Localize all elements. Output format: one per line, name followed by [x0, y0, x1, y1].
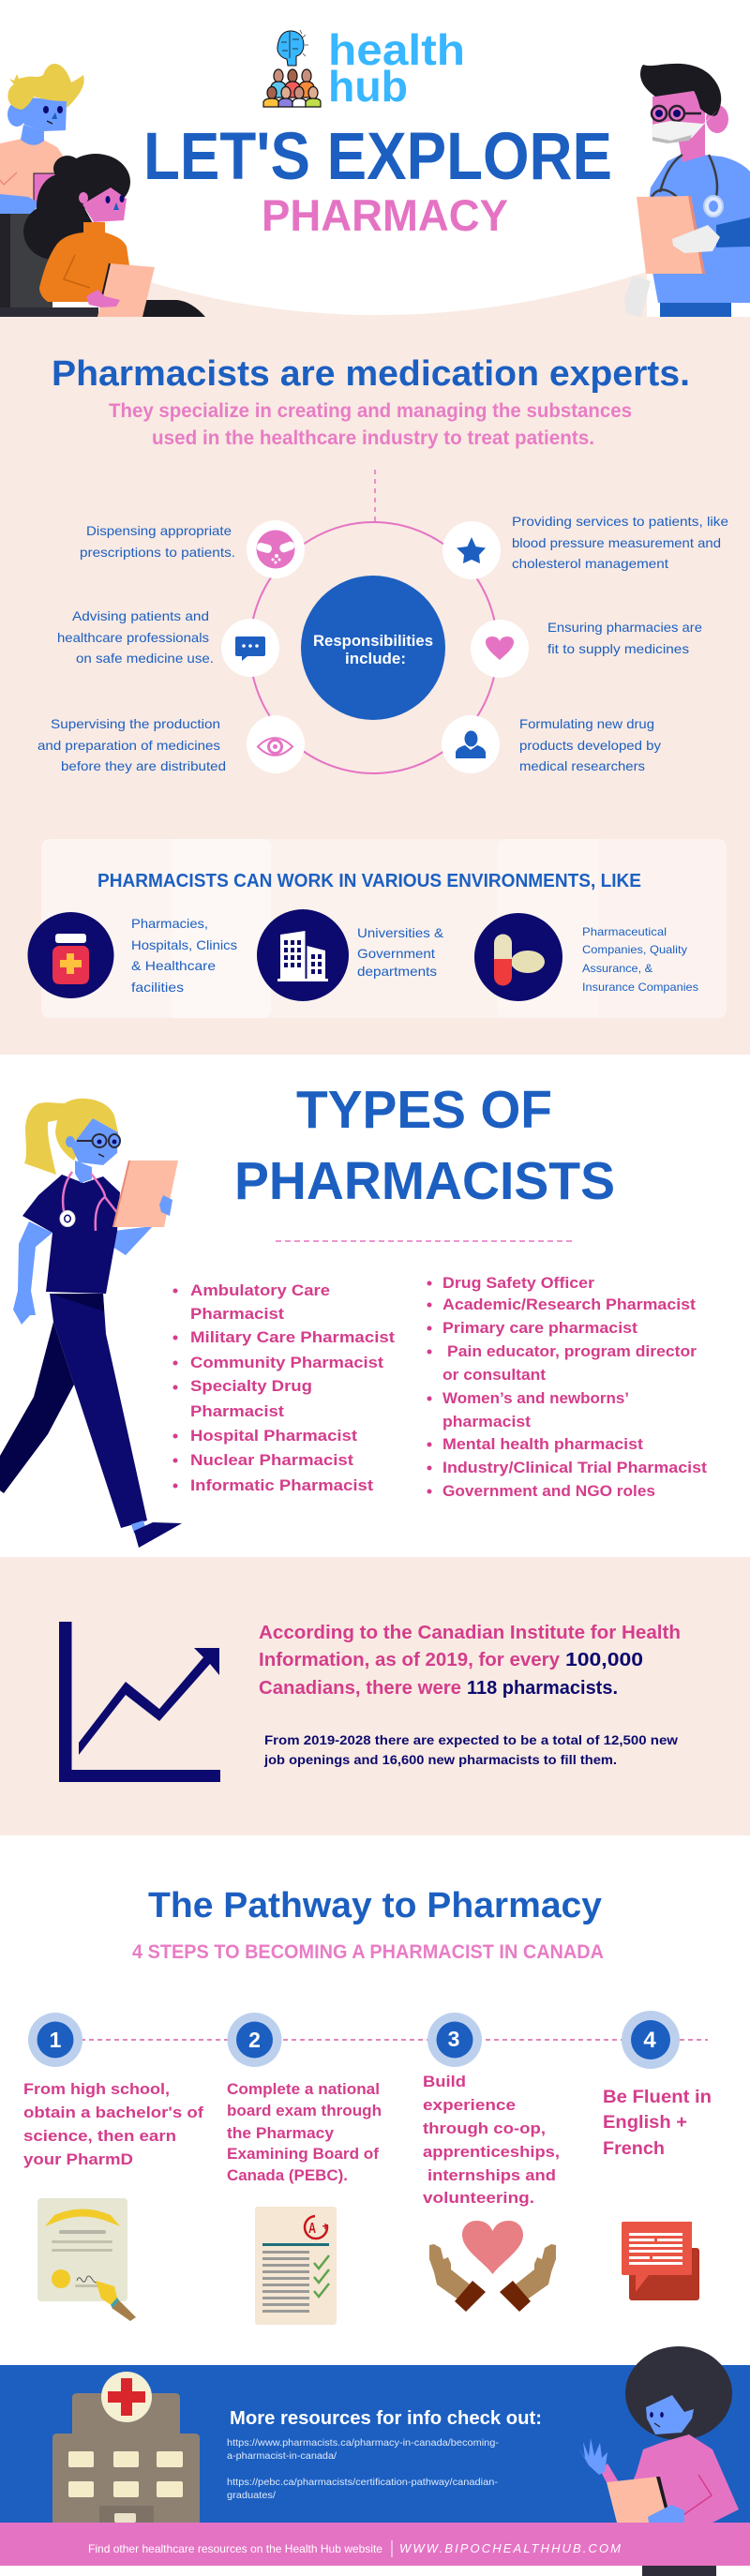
list: left column: Specialty Drug [190, 1377, 312, 1395]
text: more resources: https://pebc.ca/pharmacists/certification-pathway/canadian- [227, 2477, 499, 2488]
step 3 text: apprenticeships, [423, 2143, 560, 2161]
list: right column: Primary care pharmacist [442, 1319, 638, 1337]
icon: growth chart [59, 1622, 220, 1782]
step 2 text: Canada (PEBC). [227, 2166, 348, 2184]
step 4 text: Be Fluent in [603, 2087, 712, 2107]
icon: person [442, 715, 500, 773]
label: providing services: cholesterol management [512, 556, 668, 571]
illustration: seated woman with clipboard [0, 154, 205, 317]
logo: health hub [263, 25, 465, 111]
list: left column: Ambulatory Care [190, 1281, 330, 1299]
label: formulating: products developed by [519, 738, 661, 753]
label: dispensing [80, 523, 235, 560]
step 3 text: experience [423, 2096, 516, 2114]
icon: graded test: + [322, 2220, 329, 2233]
text: pharmaceutical: Insurance Companies [582, 981, 698, 994]
icon: graded test [255, 2207, 337, 2325]
logo wordmark: hub [328, 62, 408, 111]
header panel [0, 25, 750, 319]
text: job openings: From 2019-2028 there are expected to be a total of 12,500 new [264, 1732, 678, 1747]
text: canadian statistics [259, 1623, 681, 1699]
icon: hands and heart [429, 2221, 556, 2312]
heading: Pharmacists are medication experts. [52, 354, 690, 394]
timeline [28, 2011, 708, 2069]
step 1 text: your PharmD [23, 2150, 133, 2168]
icon: capsule and tablet [474, 913, 562, 1001]
step 2 text: the Pharmacy [227, 2124, 335, 2142]
text: more resources: More resources for info check out: [230, 2408, 542, 2429]
label: advising [57, 608, 214, 666]
step 3 text: Build [423, 2073, 466, 2090]
icon: group of people [263, 69, 321, 107]
list: left column: Pharmacist [190, 1402, 284, 1420]
list: left column: Military Care Pharmacist [190, 1328, 395, 1346]
text: job openings [263, 1732, 678, 1767]
text: more resources: graduates/ [227, 2490, 276, 2501]
subheading: steps: 4 STEPS TO BECOMING A PHARMACIST IN CANADA [132, 1941, 604, 1963]
panel: statistics [0, 1557, 750, 1835]
step 2 marker: 2 [248, 2028, 261, 2052]
label: ensuring [548, 620, 702, 656]
heading: types: TYPES OF [296, 1080, 552, 1140]
panel: work environments [28, 839, 727, 1018]
subheading: They specialize in creating and managing the substances [109, 400, 632, 422]
heading: types [234, 1080, 615, 1211]
subheading [109, 400, 632, 449]
subtitle: PHARMACY [262, 190, 508, 240]
title: LET'S EXPLORE [143, 120, 612, 194]
label: formulating [519, 716, 661, 773]
label: supervising [38, 716, 226, 773]
icon: medicine bottle [28, 912, 114, 998]
step 3 text: internships and [428, 2166, 556, 2184]
step 4 marker [622, 2011, 680, 2069]
list: left column: Pharmacist [190, 1305, 284, 1323]
list: left column: Hospital Pharmacist [190, 1427, 357, 1445]
step 3 text [423, 2073, 560, 2207]
list: right column: Drug Safety Officer [442, 1274, 594, 1292]
step 4 text: French [603, 2138, 665, 2159]
step 1 text: From high school, [23, 2080, 170, 2098]
panel: resources footer [0, 2346, 750, 2576]
icon: speech bubble [221, 619, 279, 677]
icon: graded test: A [308, 2221, 316, 2237]
text: more resources: a-pharmacist-in-canada/ [227, 2450, 337, 2462]
text: universities [357, 925, 444, 979]
step 3 marker [428, 2013, 482, 2067]
heading: environments: PHARMACISTS CAN WORK IN VARIOUS ENVIRONMENTS, LIKE [98, 871, 641, 891]
icon: eye [247, 715, 305, 773]
text: universities: Universities & [357, 925, 444, 940]
text: canadian statistics: 118 pharmacists. [467, 1678, 618, 1699]
panel: pathway [23, 1886, 712, 2325]
icon: pills [247, 520, 305, 578]
list: right column: Academic/Research Pharmacist [442, 1295, 696, 1313]
text: pharmacies: Pharmacies, [131, 916, 208, 931]
step 4 text: English + [603, 2112, 687, 2133]
list: right column: Women’s and newborns’ [442, 1389, 629, 1407]
illustration: man with tablet [0, 64, 84, 214]
label: formulating: medical researchers [519, 758, 645, 773]
text: pharmacies: & Healthcare [131, 958, 216, 973]
label: providing services: blood pressure measurement and [512, 535, 721, 550]
center circle: include: [345, 651, 406, 667]
icon: speech bubbles [622, 2222, 699, 2300]
footer strip [0, 2523, 750, 2566]
step 4 text [603, 2087, 712, 2159]
label: advising: healthcare professionals [57, 630, 209, 645]
label: supervising: and preparation of medicines [38, 738, 220, 753]
text: canadian statistics: According to the Canadian Institute for Health [259, 1623, 681, 1643]
text: universities: departments [357, 964, 437, 979]
text: pharmacies: Hospitals, Clinics [131, 937, 237, 952]
illustration: waving woman [578, 2346, 739, 2576]
list: right column: Mental health pharmacist [442, 1435, 643, 1453]
label: ensuring: Ensuring pharmacies are [548, 620, 702, 635]
label: supervising: before they are distributed [61, 758, 226, 773]
list: right column: or consultant [442, 1366, 546, 1384]
list: left column [172, 1281, 395, 1494]
text: job openings: job openings and 16,600 new pharmacists to fill them. [263, 1752, 617, 1767]
step 1 text: science, then earn [23, 2127, 176, 2145]
text: pharmaceutical: Assurance, & [582, 962, 652, 975]
list: left column: Nuclear Pharmacist [190, 1451, 353, 1469]
step 1 marker [28, 2013, 82, 2067]
text: canadian statistics: Information, as of 2019, for every [259, 1650, 561, 1670]
step 3 text: volunteering. [423, 2189, 534, 2207]
text: canadian statistics: Canadians, there were [259, 1678, 461, 1699]
step 2 text [227, 2080, 382, 2184]
label: dispensing: prescriptions to patients. [80, 545, 235, 560]
text: pharmacies [131, 916, 237, 995]
heading: pathway: The Pathway to Pharmacy [148, 1886, 602, 1925]
illustration: hospital [52, 2372, 200, 2523]
subheading: used in the healthcare industry to treat patients. [152, 427, 594, 449]
list: right column: Government and NGO roles [442, 1482, 655, 1500]
step 2 marker [227, 2013, 281, 2067]
footer strip: Find other healthcare resources on the Health Hub website [88, 2542, 382, 2555]
text: more resources: https://www.pharmacists.ca/pharmacy-in-canada/becoming- [227, 2437, 500, 2449]
label: ensuring: fit to supply medicines [548, 641, 689, 656]
heading: types: PHARMACISTS [234, 1151, 615, 1211]
step 1 marker: 1 [50, 2028, 62, 2052]
step 2 text: Examining Board of [227, 2145, 379, 2163]
diagram: responsibilities ring [38, 470, 728, 773]
step 1 text: obtain a bachelor's of [23, 2104, 203, 2121]
list: right column: Industry/Clinical Trial Pharmacist [442, 1459, 707, 1476]
illustration: doctor with mask and clipboard [624, 64, 750, 317]
text: more resources [227, 2408, 542, 2501]
logo wordmark: health [328, 25, 465, 74]
label: providing services: Providing services to patients, like [512, 514, 728, 529]
list: right column: Pain educator, program director [447, 1342, 697, 1360]
step 1 text [23, 2080, 203, 2168]
center circle [301, 576, 445, 720]
list: left column: Community Pharmacist [190, 1354, 383, 1371]
step 3 marker: 3 [448, 2027, 459, 2051]
list: left column: Informatic Pharmacist [190, 1476, 373, 1494]
list: right column [428, 1274, 707, 1500]
step 3 text: through co-op, [423, 2119, 546, 2137]
center circle: Responsibilities [313, 633, 433, 650]
step 4 marker: 4 [643, 2028, 656, 2053]
label: advising: Advising patients and [72, 608, 209, 623]
panel: types of pharmacists [0, 1080, 707, 1548]
panel: medication experts [0, 317, 750, 1055]
icon: certificate [38, 2198, 136, 2321]
icon: star [442, 521, 501, 579]
step 2 text: board exam through [227, 2102, 382, 2119]
label: formulating: Formulating new drug [519, 716, 654, 731]
text: canadian statistics: 100,000 [565, 1650, 643, 1670]
step 2 text: Complete a national [227, 2080, 380, 2098]
text: pharmaceutical: Pharmaceutical [582, 925, 667, 938]
text: pharmaceutical: Companies, Quality [582, 943, 687, 956]
text: pharmacies: facilities [131, 980, 184, 995]
label: providing services [512, 514, 728, 571]
illustration: walking pharmacist [0, 1099, 182, 1548]
footer strip: WWW.BIPOCHEALTHHUB.COM [399, 2541, 621, 2555]
text: universities: Government [357, 946, 435, 961]
label: advising: on safe medicine use. [76, 651, 214, 666]
list: right column: pharmacist [442, 1413, 531, 1430]
logo wordmark [328, 25, 465, 111]
icon: heart [471, 620, 529, 678]
label: dispensing: Dispensing appropriate [86, 523, 232, 538]
icon: buildings [257, 909, 349, 1001]
icon: brain head [278, 30, 308, 66]
text: pharmaceutical [582, 925, 698, 994]
label: supervising: Supervising the production [51, 716, 220, 731]
